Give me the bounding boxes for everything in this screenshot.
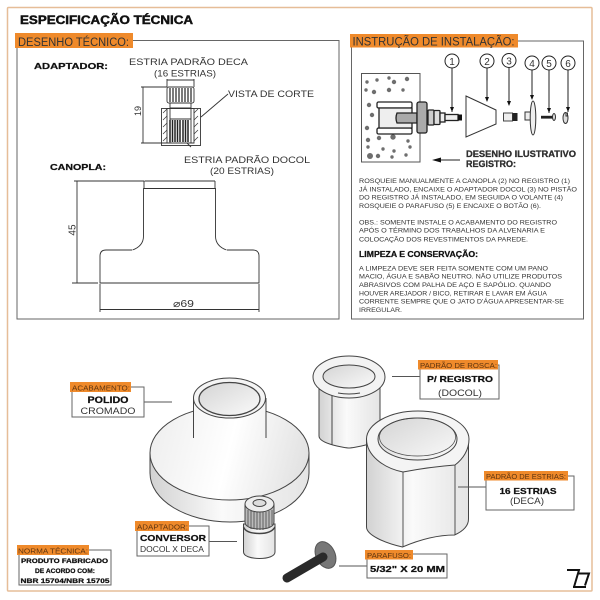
callout: acabamento xyxy=(70,382,172,417)
text: observação: COLOCAÇÃO DOS REVESTIMENTOS DA PAREDE. xyxy=(359,234,528,243)
numbered parts xyxy=(445,54,575,113)
callout: adaptador: DOCOL X DECA xyxy=(140,545,205,554)
callout: padrão de estrias: PADRÃO DE ESTRIAS: xyxy=(486,472,566,481)
dimension: diameter 69: ⌀69 xyxy=(173,299,195,310)
part 3: adaptador xyxy=(504,113,518,121)
3D: registro adapter xyxy=(313,356,385,448)
callout: adaptador: ADAPTADOR: xyxy=(137,522,188,532)
callout: adaptador xyxy=(135,521,237,556)
part 6: botão xyxy=(563,112,568,124)
label: adaptador: ADAPTADOR: xyxy=(34,61,108,71)
numbered parts: 3 xyxy=(506,56,512,68)
callout: acabamento: CROMADO xyxy=(80,406,136,417)
drawing: canopla xyxy=(100,181,259,283)
panel: desenho técnico xyxy=(15,33,339,319)
text: limpeza: IRREGULAR. xyxy=(359,307,402,314)
callout: padrão de estrias: 16 ESTRIAS xyxy=(500,486,557,496)
panel: instrução de instalação xyxy=(350,34,584,319)
text: limpeza xyxy=(359,265,565,314)
dimension: diameter 69 xyxy=(100,284,259,312)
callout: parafuso: 5/32" X 20 MM xyxy=(370,564,445,574)
drawing: adaptador xyxy=(141,79,228,147)
label: estria padrão deca: ESTRIA PADRÃO DECA xyxy=(129,57,249,68)
heading: desenho técnico: DESENHO TÉCNICO: xyxy=(18,36,129,49)
dimension: 45 xyxy=(68,181,144,283)
numbered parts: 6 xyxy=(565,59,571,70)
part 4: volante xyxy=(525,101,536,135)
text: instruções: JÁ INSTALADO, ENCAIXE O ADAPTADOR DOCOL (3) NO PISTÃO xyxy=(359,184,577,193)
label: estria padrão docol xyxy=(184,155,310,177)
label: vista de corte: VISTA DE CORTE xyxy=(228,89,314,100)
text: limpeza: HOUVER AREJADOR / BICO, RETIRAR E LAVAR EM ÁGUA xyxy=(359,288,548,297)
callout: padrão de estrias: (DECA) xyxy=(510,496,544,506)
callout: parafuso xyxy=(339,550,447,578)
label: estria padrão deca xyxy=(129,57,249,80)
label: estria padrão deca: (16 ESTRIAS) xyxy=(154,68,216,80)
numbered parts: 4 xyxy=(529,59,535,70)
callout: padrão de estrias xyxy=(458,471,574,510)
text: limpeza: MACIO, ÁGUA E SABÃO NEUTRO. NÃO UTILIZE PRODUTOS xyxy=(359,272,563,281)
3D: small adapter xyxy=(244,496,275,558)
callout: norma técnica: PRODUTO FABRICADO xyxy=(21,558,108,565)
text: limpeza: CORRENTE SEMPRE QUE O JATO D'ÁGUA APRESENTAR-SE xyxy=(359,297,565,306)
icon: cart xyxy=(567,570,589,587)
text: limpeza: A LIMPEZA DEVE SER FEITA SOMENTE COM UM PANO xyxy=(359,265,548,272)
dimension: 45: 45 xyxy=(68,224,78,236)
text: instruções: DO REGISTRO JÁ INSTALADO, EM SEGUIDA O VOLANTE (4) xyxy=(359,193,563,202)
callout: parafuso: PARAFUSO: xyxy=(367,553,411,560)
callout: norma técnica: DE ACORDO COM: xyxy=(35,568,95,575)
callout: desenho ilustrativo: REGISTRO: xyxy=(466,159,516,169)
callout: acabamento: POLIDO xyxy=(88,395,128,405)
text: observação: OBS.: SOMENTE INSTALE O ACABAMENTO DO REGISTRO xyxy=(359,219,557,226)
callout: norma técnica: NBR 15704/NBR 15705 xyxy=(20,578,110,585)
dimension: 19 xyxy=(141,87,167,143)
label: estria padrão docol: (20 ESTRIAS) xyxy=(210,166,274,177)
label: estria padrão docol: ESTRIA PADRÃO DOCOL xyxy=(184,155,310,166)
dimension text: 19: 19 xyxy=(133,106,143,116)
text: observação xyxy=(359,219,557,243)
text: limpeza: ABRASIVOS COM PALHA DE AÇO E SAPÓLIO. QUANDO xyxy=(359,280,551,289)
numbered parts: 5 xyxy=(546,59,552,70)
callout: norma técnica xyxy=(17,545,111,585)
text: instruções: ROSQUEIE O PARAFUSO (5) E ENCAIXE O BOTÃO (6). xyxy=(359,201,541,210)
callout: norma técnica: NORMA TÉCNICA: xyxy=(18,546,88,556)
title: ESPECIFICAÇÃO TÉCNICA xyxy=(20,14,193,27)
callout: padrão de rosca xyxy=(392,360,499,399)
text: instruções: ROSQUEIE MANUALMENTE A CANOPLA (2) NO REGISTRO (1) xyxy=(359,178,570,185)
heading: instrução de instalação: INSTRUÇÃO DE INSTALAÇÃO: xyxy=(352,36,514,48)
text: instruções xyxy=(359,178,577,210)
arrow: to wall xyxy=(439,159,460,161)
arrowhead xyxy=(432,158,441,162)
part 2: cone xyxy=(466,96,496,137)
numbered parts: 1 xyxy=(449,57,455,68)
callout: padrão de rosca: P/ REGISTRO xyxy=(427,374,493,384)
illustration: wall and registro xyxy=(362,74,462,162)
callout: adaptador: CONVERSOR xyxy=(140,533,206,543)
label: canopla: CANOPLA: xyxy=(50,162,106,172)
heading: limpeza e conservação: LIMPEZA E CONSERVAÇÃO: xyxy=(359,250,478,259)
callout: desenho ilustrativo xyxy=(466,149,576,169)
3D: deca adapter xyxy=(366,411,469,547)
text: observação: APÓS O TÉRMINO DOS TRABALHOS DA ALVENARIA E xyxy=(359,226,546,235)
callout: desenho ilustrativo: DESENHO ILUSTRATIVO xyxy=(466,149,576,159)
part 5: parafuso xyxy=(541,114,556,120)
callout: padrão de rosca: (DOCOL) xyxy=(438,388,482,398)
3D: parafuso xyxy=(287,538,340,578)
numbered parts: 2 xyxy=(484,57,490,68)
callout: padrão de rosca: PADRÃO DE ROSCA: xyxy=(420,361,497,370)
callout: acabamento: ACABAMENTO: xyxy=(72,384,130,392)
3D: canopla xyxy=(150,378,309,522)
